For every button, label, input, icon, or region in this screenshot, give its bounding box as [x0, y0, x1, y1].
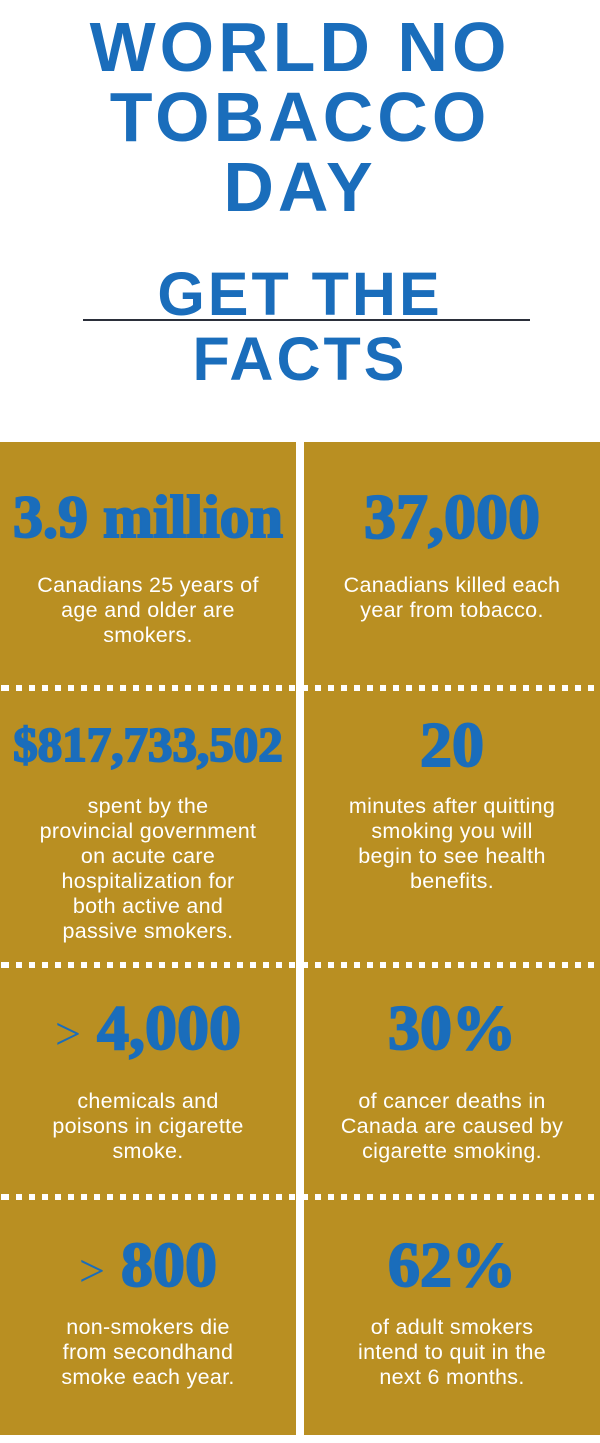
stat: 20: 20 — [420, 709, 484, 780]
text: intend to quit: of adult smokers — [371, 1315, 533, 1339]
title: DAY — [223, 148, 377, 226]
subtitle: get the facts — [157, 260, 443, 393]
text: cancer: of cancer deaths in — [358, 1089, 546, 1113]
subtitle: get the facts: FACTS — [193, 325, 407, 393]
text: chemicals — [52, 1089, 244, 1163]
text: chemicals: poisons in cigarette — [52, 1114, 244, 1138]
text: minutes: smoking you will — [371, 819, 533, 843]
stat: 37,000: 37,000 — [364, 481, 540, 552]
text: non-smokers: non-smokers die — [66, 1315, 230, 1339]
text: spent — [40, 794, 256, 943]
text: cancer: cigarette smoking. — [362, 1139, 542, 1163]
stat: $817,733,502: $817,733,502 — [13, 717, 283, 772]
text: spent: both active and — [73, 894, 223, 918]
stat: >4,000: > 4,000 — [55, 992, 241, 1063]
text: intend to quit — [358, 1315, 546, 1389]
title: WORLD NO — [90, 8, 510, 86]
text: killed: Canadians killed each — [344, 573, 560, 597]
text: smokers: age and older are — [61, 598, 235, 622]
text: intend to quit: next 6 months. — [379, 1365, 525, 1389]
panel: left column — [0, 442, 296, 1435]
text: non-smokers: smoke each year. — [61, 1365, 235, 1389]
text: non-smokers: from secondhand — [63, 1340, 233, 1364]
stat: 62%: 62% — [388, 1229, 516, 1300]
panel: right column — [304, 442, 600, 1435]
stat: >800: > 800 — [79, 1229, 217, 1300]
text: smokers — [37, 573, 259, 647]
text: minutes: benefits. — [410, 869, 494, 893]
text: chemicals: chemicals and — [77, 1089, 219, 1113]
title: TOBACCO — [110, 78, 490, 156]
text: smokers: smokers. — [103, 623, 193, 647]
text: spent: provincial government — [40, 819, 256, 843]
text: killed — [344, 573, 560, 622]
text: chemicals: smoke. — [112, 1139, 184, 1163]
subtitle: get the facts: GET THE — [157, 260, 443, 328]
stat: 30%: 30% — [388, 992, 516, 1063]
text: non-smokers — [61, 1315, 235, 1389]
title — [90, 8, 510, 226]
text: cancer: Canada are caused by — [341, 1114, 563, 1138]
text: smokers: Canadians 25 years of — [37, 573, 259, 597]
text: spent: passive smokers. — [63, 919, 233, 943]
text: minutes: minutes after quitting — [349, 794, 555, 818]
text: killed: year from tobacco. — [360, 598, 544, 622]
text: intend to quit: intend to quit in the — [358, 1340, 546, 1364]
text: minutes — [349, 794, 555, 893]
text: cancer — [341, 1089, 563, 1163]
text: spent: hospitalization for — [61, 869, 235, 893]
text: spent: on acute care — [81, 844, 215, 868]
text: spent: spent by the — [88, 794, 208, 818]
text: minutes: begin to see health — [358, 844, 546, 868]
stat: 3.9 million: 3.9 million — [13, 484, 283, 550]
divider line — [83, 319, 530, 321]
